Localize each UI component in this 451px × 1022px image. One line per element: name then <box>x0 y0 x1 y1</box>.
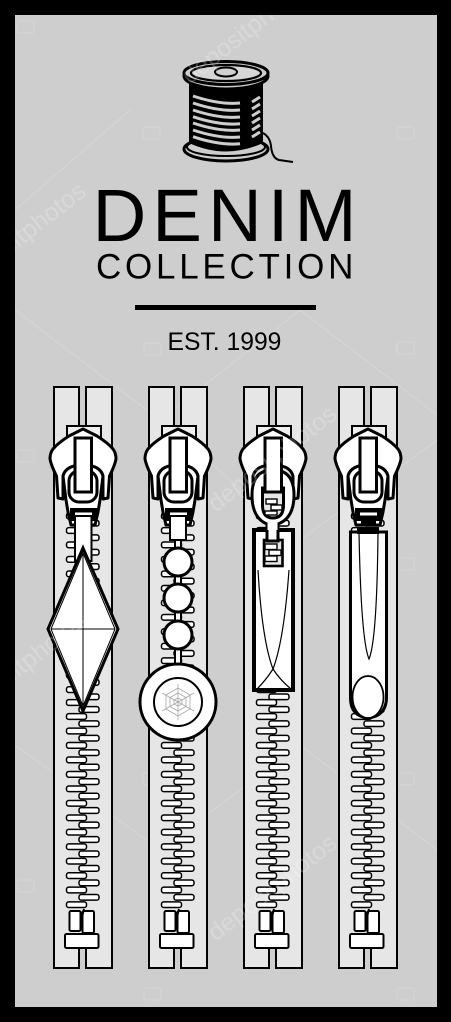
subtitle: COLLECTION: COLLECTION <box>96 248 357 286</box>
zipper 3: ring and rectangular pull <box>240 387 306 968</box>
icon: thread spool <box>184 62 293 162</box>
established date: EST. 1999 <box>168 329 281 356</box>
watermark text: depositphotos <box>202 400 342 518</box>
zipper 1: diamond pull <box>48 387 118 968</box>
watermark text <box>0 0 342 947</box>
title: DENIM: DENIM <box>92 174 363 257</box>
zipper 2: beads and round pendant pull <box>140 387 216 968</box>
zipper 4: long rounded pull <box>335 387 401 968</box>
divider line <box>135 305 316 310</box>
watermark text: depositphotos <box>202 829 342 947</box>
